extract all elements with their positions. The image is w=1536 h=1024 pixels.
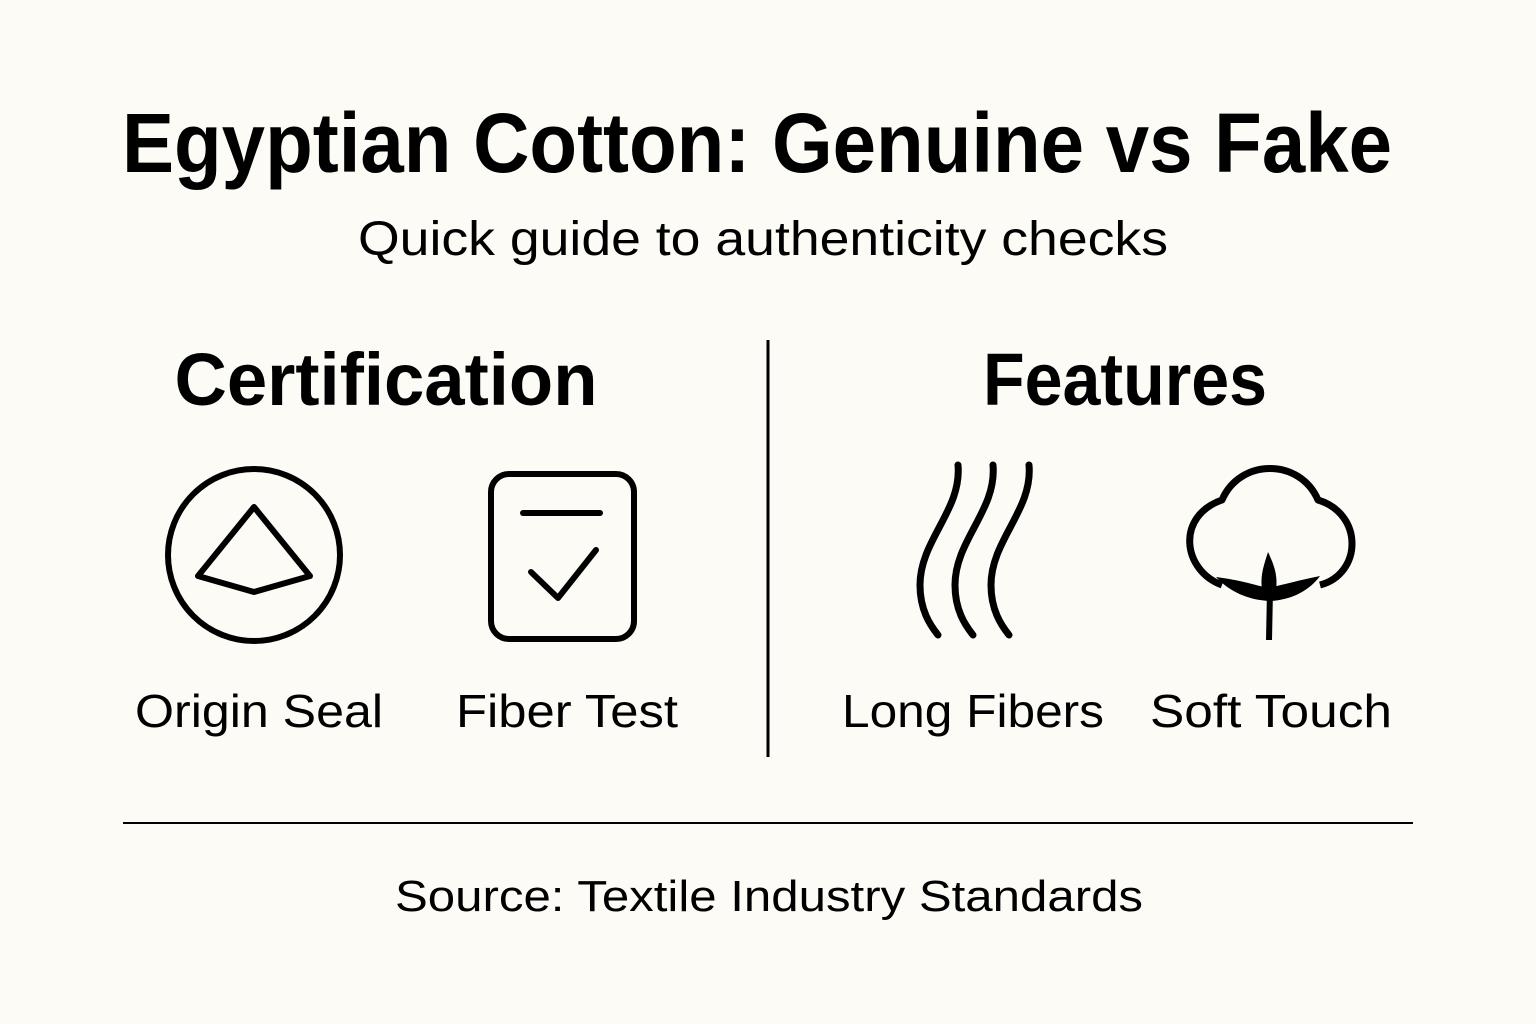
label: Origin Seal: Origin Seal xyxy=(135,685,383,737)
label: Fiber Test: Fiber Test xyxy=(456,685,678,737)
icon: long fibers xyxy=(920,465,1029,635)
subtitle: Quick guide to authenticity checks xyxy=(358,213,1168,266)
icon: origin seal xyxy=(168,469,340,641)
label: Soft Touch: Soft Touch xyxy=(1150,685,1392,737)
title: Egyptian Cotton: Genuine vs Fake xyxy=(122,96,1392,190)
label: Long Fibers: Long Fibers xyxy=(842,685,1104,737)
icon: cotton boll xyxy=(1190,468,1352,640)
source note: Source: Textile Industry Standards xyxy=(395,872,1143,921)
icon: fiber test document xyxy=(491,474,634,639)
heading: Certification: Certification xyxy=(174,338,598,421)
heading: Features: Features xyxy=(983,338,1267,421)
